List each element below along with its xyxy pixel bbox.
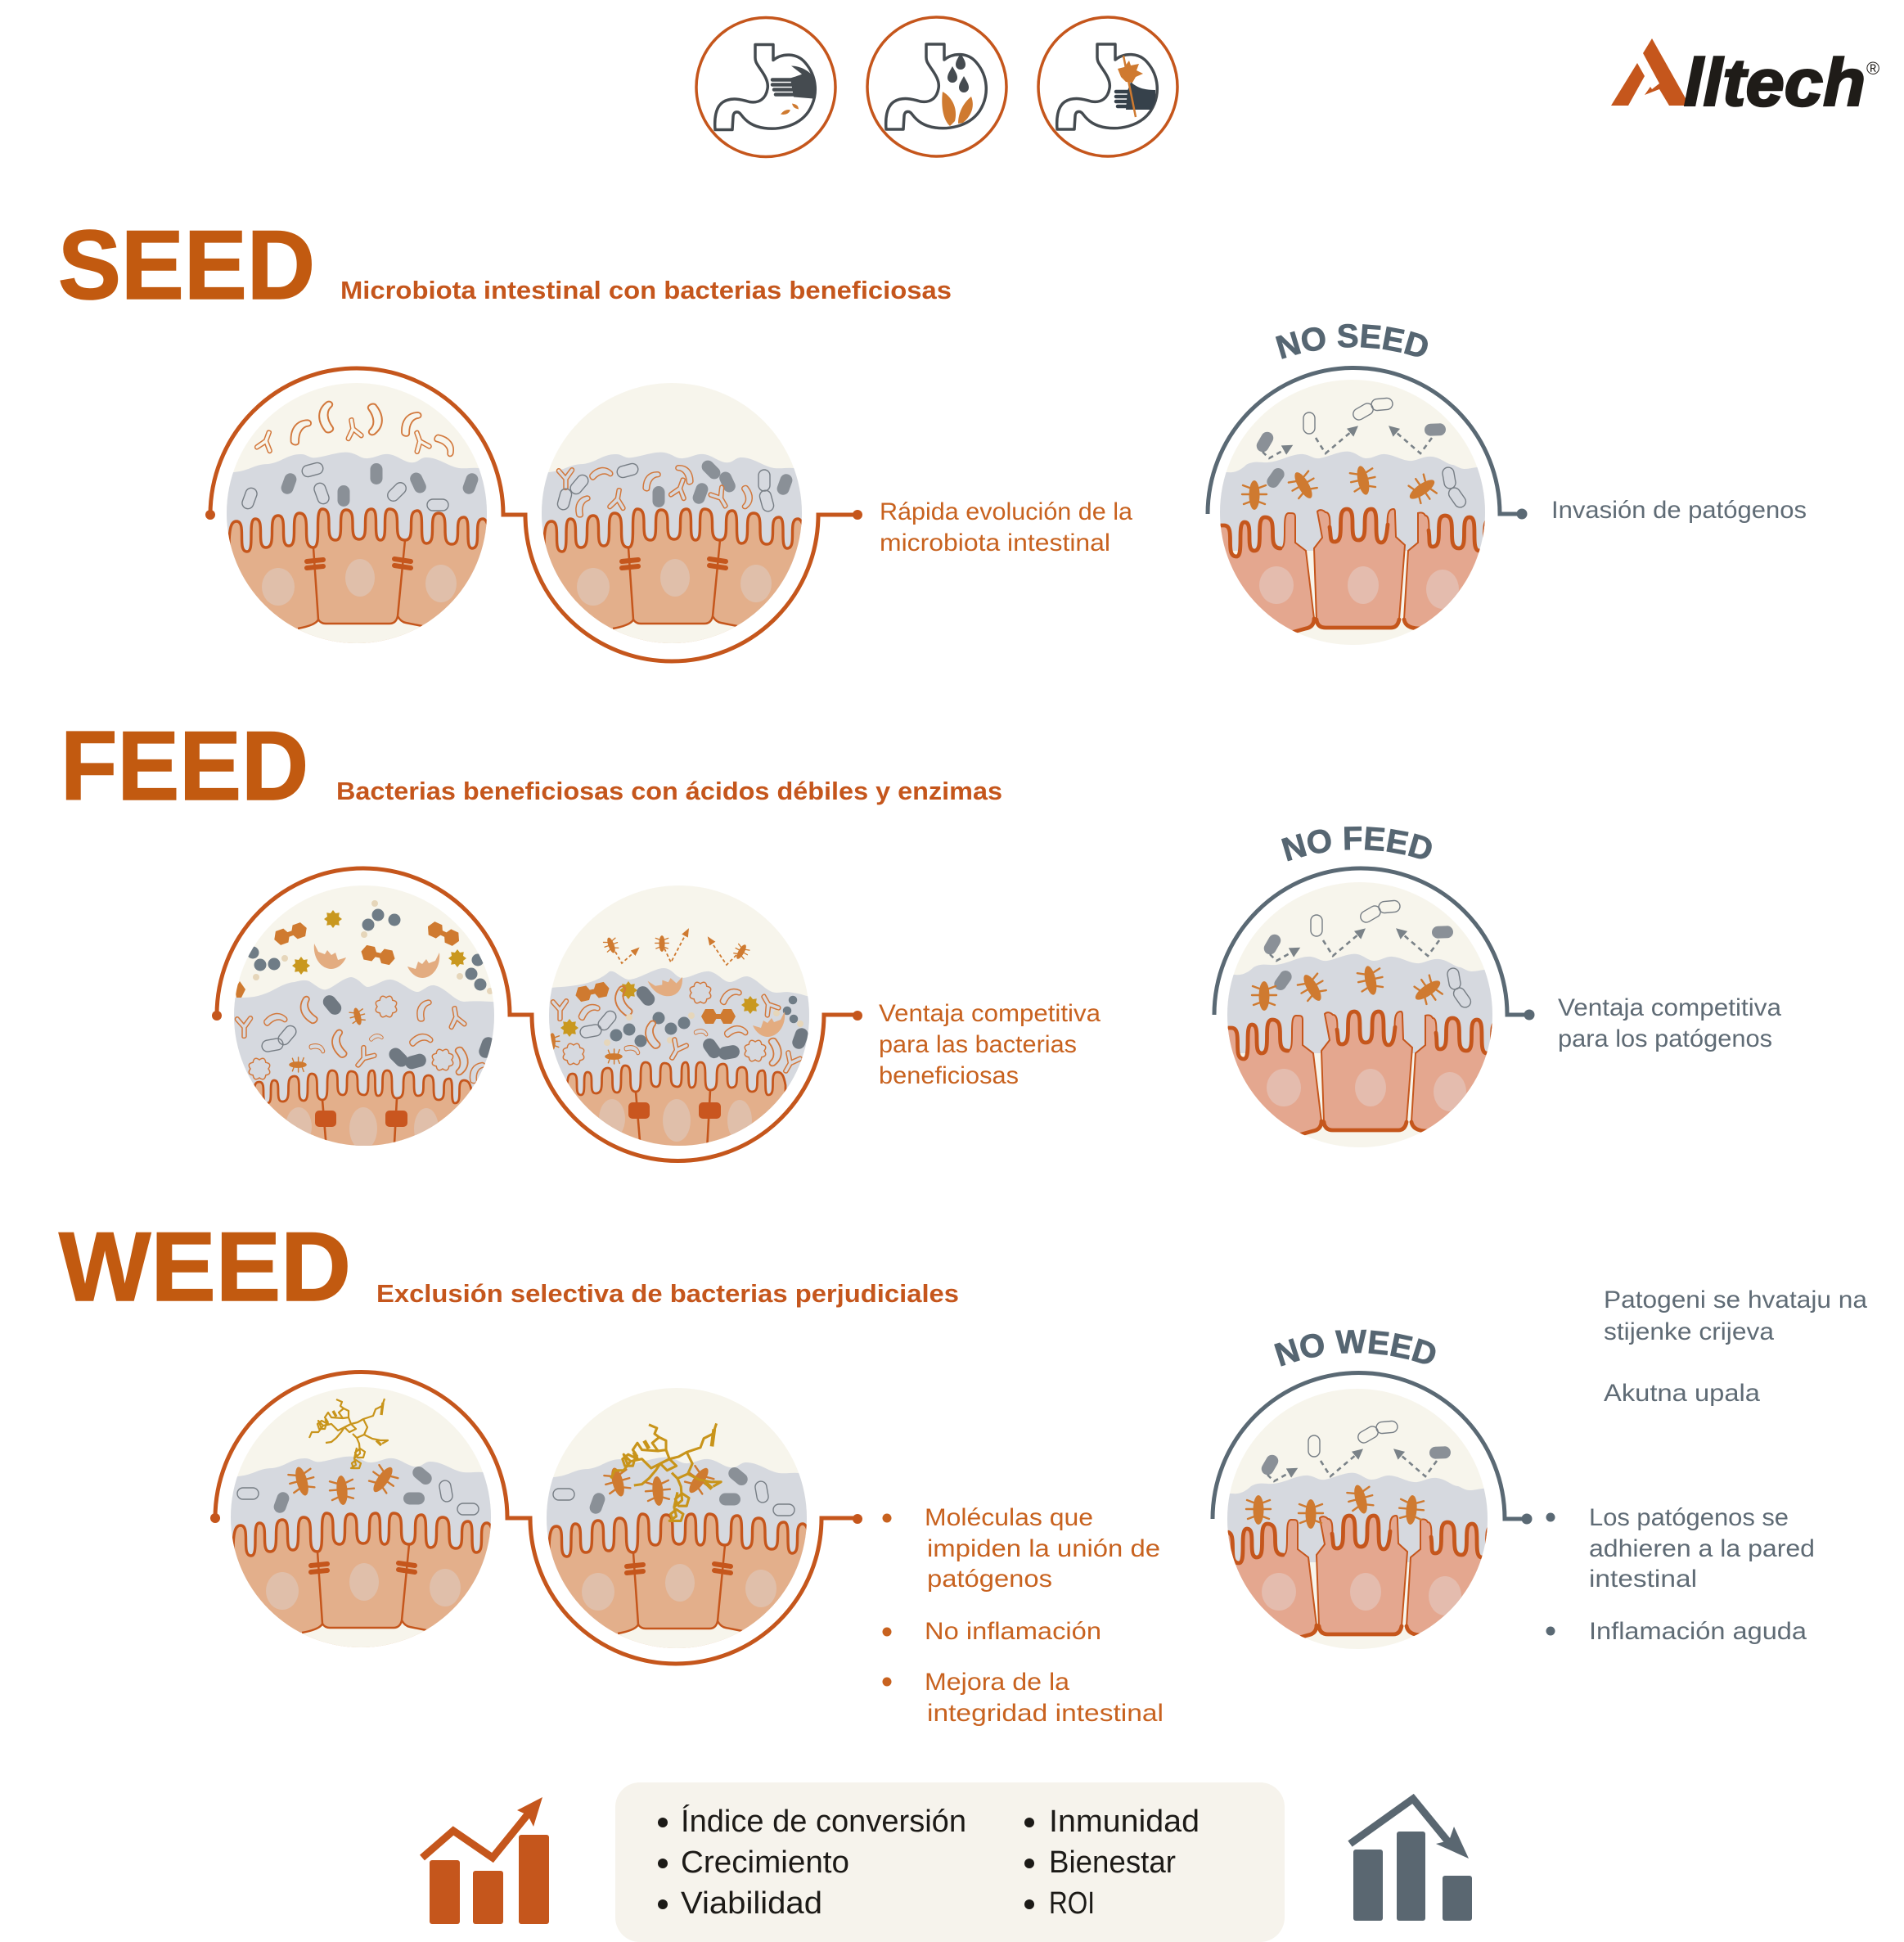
icon: stomach with hand and leaf	[1038, 17, 1177, 156]
logo: Alltech: lltech	[1684, 46, 1866, 120]
panel: feed circle 1	[234, 885, 494, 1146]
title: NO WEED: NO WEED	[1274, 1329, 1435, 1367]
text: feed benefit: para las bacterias	[879, 1031, 1077, 1058]
heading: SEED: SEED	[58, 210, 315, 320]
heading: FEED: FEED	[61, 711, 308, 821]
title: NO FEED	[1281, 827, 1432, 861]
panel: weed circle 1	[231, 1387, 491, 1647]
list: no weed effects: Los patógenos se	[1589, 1504, 1789, 1531]
text: seed benefit: microbiota intestinal	[880, 529, 1110, 556]
title: NO FEED: NO FEED	[1281, 827, 1432, 861]
connector: no feed	[1214, 868, 1535, 1020]
list: weed benefits: impiden la unión de	[927, 1535, 1160, 1562]
icon: stomach with drops and leaves	[867, 17, 1006, 156]
connector: feed	[212, 868, 862, 1160]
connector: no weed	[1213, 1373, 1532, 1524]
connector: weed	[210, 1372, 862, 1664]
list: weed benefits: Mejora de la	[925, 1669, 1069, 1696]
subtitle: seed: Microbiota intestinal con bacterias beneficiosas	[340, 276, 952, 304]
panel: outcomes list: Viabilidad	[681, 1886, 822, 1921]
connector: no seed	[1208, 368, 1527, 519]
list: weed benefits: patógenos	[927, 1566, 1052, 1593]
list: weed benefits: Moléculas que	[925, 1504, 1093, 1531]
list: weed benefits: integridad intestinal	[927, 1700, 1164, 1727]
logo: Alltech	[1611, 38, 1879, 120]
panel: no seed circle	[1213, 380, 1492, 645]
list: weed benefits: No inflamación	[925, 1618, 1101, 1645]
panel: outcomes list: Crecimiento	[681, 1845, 849, 1880]
subtitle: feed: Bacterias beneficiosas con ácidos débiles y enzimas	[336, 777, 1002, 805]
panel: no feed circle	[1221, 882, 1499, 1147]
title: NO SEED: NO SEED	[1275, 324, 1428, 359]
subtitle: weed: Exclusión selectiva de bacterias perjudiciales	[376, 1279, 959, 1308]
panel: outcomes list: ROI	[1049, 1886, 1095, 1921]
list: no weed effects: Inflamación aguda	[1589, 1618, 1807, 1645]
list: no weed effects: intestinal	[1589, 1566, 1697, 1593]
text: feed benefit: beneficiosas	[879, 1062, 1019, 1089]
text: croatian note	[1604, 1286, 1867, 1407]
panel: outcomes list: Índice de conversión	[681, 1804, 966, 1839]
text: no feed: Ventaja competitiva	[1558, 994, 1781, 1021]
title: NO SEED	[1275, 324, 1428, 359]
text: feed benefit: Ventaja competitiva	[879, 1000, 1101, 1027]
icon: rising bar chart	[422, 1797, 549, 1924]
text: croatian note: Akutna upala	[1604, 1380, 1760, 1407]
logo: Alltech: ®	[1866, 58, 1879, 79]
panel: feed circle 2	[549, 885, 809, 1146]
icon: falling bar chart	[1350, 1799, 1472, 1921]
panel: no weed circle	[1216, 1389, 1497, 1649]
text: croatian note: Patogeni se hvataju na	[1604, 1286, 1867, 1313]
text: no feed	[1558, 994, 1781, 1052]
list: no weed effects: adhieren a la pared	[1589, 1535, 1815, 1562]
list: no weed effects	[1546, 1504, 1815, 1645]
text: seed benefit	[880, 498, 1132, 556]
text: seed benefit: Rápida evolución de la	[880, 498, 1132, 525]
panel: weed circle 2	[547, 1388, 807, 1648]
panel: outcomes list	[615, 1782, 1285, 1942]
connector: seed	[205, 368, 862, 661]
panel: seed circle 2	[542, 383, 802, 643]
text: croatian note: stijenke crijeva	[1604, 1318, 1774, 1345]
text: no seed: Invasión de patógenos	[1551, 497, 1807, 524]
text: no feed: para los patógenos	[1558, 1025, 1772, 1052]
panel: seed circle 1	[227, 383, 487, 643]
panel: outcomes list: Bienestar	[1049, 1845, 1176, 1880]
list: weed benefits	[882, 1504, 1164, 1727]
icon: stomach with hand and seeds	[696, 18, 835, 157]
panel: outcomes list: Inmunidad	[1049, 1805, 1200, 1839]
heading: WEED: WEED	[59, 1212, 351, 1322]
text: feed benefit	[879, 1000, 1101, 1089]
